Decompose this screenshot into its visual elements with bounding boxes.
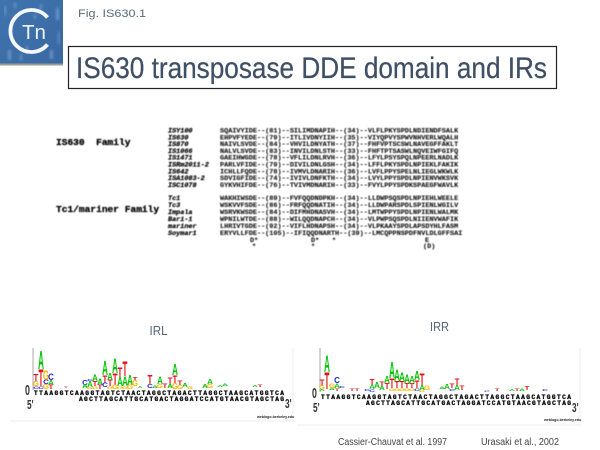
IRR sequence logo: C: [339, 386, 346, 389]
IRR sequence logo: A: [369, 385, 375, 391]
IRL sequence logo: T: [113, 370, 117, 389]
IRL sequence logo: G: [117, 386, 123, 390]
IRL sequence logo: G: [157, 384, 163, 389]
IRR sequence logo: T: [405, 381, 410, 390]
family label: Tc1/mariner: Tc1/mariner Family: [56, 204, 159, 215]
IRL position labels: AGCTTAGCATTGCATGACTAGGATCCATGTAACGTAGCTAG: [79, 396, 284, 403]
IRR sequence logo: T: [400, 379, 405, 390]
IRL sequence logo: T: [98, 385, 103, 391]
IRL sequence logo: T: [118, 366, 122, 381]
IRR 3' marker: 3': [572, 401, 579, 416]
IRR sequence logo: [319, 348, 549, 394]
IRL sequence logo: G: [43, 382, 49, 391]
IRL panel frame: [10, 348, 293, 421]
IRL label: IRL: [150, 324, 168, 338]
IRR sequence logo: T: [325, 368, 329, 394]
Tc1/mariner family sequences: [220, 195, 462, 238]
IRR sequence logo: G: [394, 388, 400, 392]
IS630 family sequences: SDVIGFIDE--(74)--IVIVLDNFKTH--(34)--LVYLPPYSPDLNPIENVWKSVK: [220, 175, 459, 183]
IRL sequence logo: A: [102, 358, 108, 380]
IRR sequence logo: A: [519, 388, 525, 392]
IRL sequence logo: T: [148, 373, 153, 388]
IS630 family names: IS870: [168, 141, 188, 149]
IRR sequence logo: G: [424, 386, 431, 392]
conserved residue markers: D*: [250, 237, 258, 245]
IRL sequence logo: G: [92, 386, 98, 390]
IRL sequence logo: T: [163, 384, 168, 390]
IRL sequence logo: T: [258, 384, 263, 388]
IS630 family names: ISA1083-2: [168, 175, 205, 183]
IRL sequence logo: A: [97, 377, 103, 387]
IS630 family names: ISC1078: [168, 182, 197, 190]
conserved residue markers: *: [332, 237, 336, 245]
family label: IS630: IS630 Family: [56, 137, 131, 148]
IRL sequence logo: G: [177, 385, 183, 390]
IRL sequence logo: A: [217, 385, 224, 388]
IRL sequence logo: A: [202, 384, 208, 389]
IRR sequence logo: G: [319, 385, 325, 390]
IS630 family sequences: [220, 128, 459, 190]
conserved residue markers: D*: [311, 237, 319, 245]
IRL sequence logo: C: [82, 378, 89, 387]
IRR sequence logo: T: [410, 381, 415, 390]
IRR sequence logo: C: [364, 389, 371, 392]
IRL sequence logo: A: [157, 375, 163, 387]
IRR sequence logo: C: [334, 376, 340, 385]
IRR sequence logo: A: [419, 383, 426, 392]
IRL sequence logo: T: [123, 359, 128, 381]
IRL sequence logo: A: [182, 383, 188, 388]
IRR sequence logo: T: [495, 388, 500, 392]
IS630 family names: IS1471: [168, 155, 192, 163]
IS630 family names: IS642: [168, 168, 188, 176]
IRL sequence logo: T: [34, 372, 39, 383]
Tc1/mariner family names: Tc3: [168, 202, 180, 210]
IRR sequence logo: A: [384, 374, 390, 385]
IRL zero tick: 0: [25, 382, 30, 399]
IRL sequence logo: T: [64, 386, 68, 388]
IRR sequence logo: A: [319, 389, 326, 392]
IRL sequence logo: T: [39, 365, 43, 391]
IRR sequence logo: G: [419, 390, 426, 393]
IRL sequence logo: A: [127, 371, 133, 389]
IS630 family sequences: GAEIHWGDE--(78)--VFLILDNLRVH--(36)--LFYLPSYSPQLNPEERLNADLK: [220, 155, 459, 163]
IRL sequence logo: G: [132, 379, 138, 388]
IRR sequence logo: C: [369, 389, 375, 393]
IRL sequence logo: C: [33, 386, 39, 390]
IRL sequence logo: A: [152, 385, 158, 389]
IRL sequence logo: G: [207, 384, 213, 389]
title: IS630 transposase DDE domain and IRs: [76, 52, 547, 85]
figure number: Fig. IS630.1: [78, 8, 146, 20]
IRR 5' marker: 5': [313, 401, 320, 416]
IRR zero tick: 0: [312, 385, 317, 402]
IRR sequence logo: A: [374, 381, 380, 390]
IS630 family sequences: GYKVHIFDE--(76)--TVIVMDNARIH--(33)--FVYLPPYSPDKSPAEGFWAVLK: [220, 182, 459, 190]
IRR position labels: AGCTTAGCATTGCATGACTAGGATCCATGTAACGTAGCTAG: [366, 400, 571, 407]
IRL sequence logo: G: [107, 386, 113, 390]
IRL sequence logo: C: [102, 383, 108, 389]
IRR sequence logo: A: [329, 387, 335, 391]
Tc1/mariner family names: Tc1: [168, 195, 180, 203]
IS630 family names: IS630: [168, 134, 188, 142]
IRR sequence logo: G: [329, 384, 336, 390]
IS630 family sequences: PARLVFIDE--(79)--DIVILDNLGSH--(34)--LFFLPKYSPDLNPIEKLFAKIK: [220, 162, 459, 170]
IRR sequence logo: A: [454, 383, 461, 392]
IRL sequence logo: C: [43, 380, 49, 386]
citation: Cassier-Chauvat: Cassier-Chauvat et al. 1997: [338, 437, 447, 448]
IRL sequence logo: A: [117, 375, 123, 390]
IRL sequence logo: G: [187, 386, 193, 390]
IRR sequence logo: A: [379, 386, 385, 391]
IS630 family sequences: EHPVFYEDE--(79)--ITLIVDNYIIH--(35)--VIYQPVYSPWVNHVERLWQALH: [220, 134, 458, 142]
IRR sequence logo: C: [414, 388, 420, 392]
IRL sequence logo: G: [122, 386, 128, 390]
IS630 family sequences: NALVLSVDE--(83)--INVILDNLSTH--(33)--FHFTPTSASWLNQVEIWFGIFQ: [220, 148, 458, 156]
IS630 family names: [168, 128, 209, 190]
IRL sequence logo: A: [112, 356, 118, 378]
IRL sequence logo: G: [127, 385, 134, 391]
IRR sequence logo: T: [385, 382, 390, 391]
conserved residue markers: *: [311, 243, 315, 251]
IRR sequence logo: T: [415, 379, 420, 391]
IRR sequence logo: T: [350, 388, 355, 392]
IRL sequence logo: T: [178, 381, 183, 387]
IRL sequence logo: C: [147, 384, 153, 389]
IRL logo credit: weblogo.berkeley.edu: [256, 415, 294, 419]
IRL sequence logo: [33, 347, 263, 391]
IRL sequence logo: A: [107, 371, 113, 382]
IRL sequence logo: A: [172, 361, 178, 379]
IRR sequence logo: A: [444, 382, 451, 391]
Tc1/mariner family names: Bari-1: [168, 216, 192, 224]
IRL sequence logo: A: [87, 380, 93, 389]
IRL sequence logo: G: [33, 379, 39, 388]
IRL sequence logo: T: [49, 385, 54, 391]
icon: CTn logo: [0, 0, 63, 66]
conserved residue markers: [250, 237, 435, 251]
IRR sequence logo: A: [414, 369, 420, 384]
IRL position labels: [34, 390, 284, 403]
IRL sequence logo: G: [43, 369, 49, 384]
Tc1/mariner family sequences: ERYVLLFDE--(105)--IFIQQDNARTH--(39)--LMCQPPNSPDFNVLDLGFFSAI: [220, 230, 462, 238]
Tc1/mariner family names: [167, 195, 197, 238]
Tc1/mariner family sequences: WSKVVFSDE--(86)--FRFQQDNATIH--(34)--LLDWPARSPDLSPIENLWGILV: [220, 202, 459, 210]
IRR sequence logo: G: [409, 388, 415, 392]
IRR sequence logo: T: [395, 379, 400, 390]
IRR label: IRR: [430, 320, 449, 334]
IS630 family sequences: SQAIVYIDE--(81)--SILIMDNAPIH--(34)--VLFLPKYSPDLNDIENDFSALK: [220, 128, 459, 136]
IRL sequence logo: T: [108, 378, 113, 388]
IRL sequence logo: A: [252, 385, 259, 388]
IRL sequence logo: C: [48, 372, 54, 382]
IRR sequence logo: T: [370, 378, 375, 387]
IRR sequence logo: T: [460, 386, 465, 392]
IRR sequence logo: T: [420, 370, 424, 389]
IRL sequence logo: A: [48, 378, 55, 387]
IRR sequence logo: G: [399, 388, 405, 392]
IRR logo credit: weblogo.berkeley.edu: [543, 418, 581, 422]
IRL sequence logo: C: [87, 379, 94, 382]
IRR sequence logo: A: [439, 386, 445, 390]
IRL sequence logo: T: [133, 377, 137, 382]
IRL sequence logo: A: [207, 377, 214, 386]
conserved residue markers: E: [425, 237, 429, 245]
IRL sequence logo: T: [173, 374, 178, 386]
IRR sequence logo: A: [399, 372, 405, 385]
citation: Urasaki: Urasaki et al., 2002: [481, 437, 559, 448]
IRR sequence logo: A: [389, 357, 395, 383]
IRL sequence logo: A: [38, 347, 44, 376]
conserved residue markers: *: [252, 243, 256, 251]
IRL sequence logo: T: [103, 374, 108, 386]
IS630 family names: IS1066: [168, 148, 192, 156]
sequence alignment: [56, 128, 462, 251]
IRL sequence logo: A: [122, 375, 128, 390]
IRR sequence logo: T: [380, 382, 385, 388]
IRL 3' marker: 3': [285, 397, 292, 412]
IS630 family sequences: NAIVLSVDE--(84)--VHVILDNYATH--(37)--FHFVPTSCSWLNAVEGFFAKLT: [220, 141, 458, 149]
IRL sequence logo: A: [222, 383, 228, 387]
IRR position labels: TTAAGGTCAAGGTAGTCTAACTAGGCTAGACTTAGGCTAAGCATGGTCA: [321, 394, 571, 401]
IRR sequence logo: A: [394, 366, 400, 385]
IRR sequence logo: T: [320, 378, 325, 388]
IRR position labels: [321, 394, 571, 407]
Tc1/mariner family names: mariner: [167, 223, 197, 231]
IRR sequence logo: G: [389, 388, 395, 392]
panel: IRL: [10, 324, 294, 421]
IRR sequence logo: G: [404, 388, 410, 392]
IRL position labels: TTAAGGTCAAGGTAGTCTAACTAGGCTAGACTTAGGCTAAGCATGGTCA: [34, 390, 284, 397]
IRL sequence logo: C: [38, 386, 44, 390]
IRR sequence logo: T: [455, 377, 460, 387]
IS630 family names: ISY100: [168, 128, 192, 136]
IS630 family names: ISRm2011-2: [168, 162, 209, 170]
IRR sequence logo: T: [390, 377, 394, 392]
IRL sequence logo: A: [167, 384, 173, 389]
IRR sequence logo: C: [542, 389, 549, 392]
IRR sequence logo: A: [334, 384, 340, 390]
IRL sequence logo: T: [168, 376, 173, 386]
IRR sequence logo: T: [525, 386, 529, 391]
IRR sequence logo: T: [450, 384, 455, 390]
IS630 family sequences: ICHLLFQDE--(78)--IVMVLDNARIH--(36)--LVFLPPYSPELNLIEGLWKWLK: [220, 168, 459, 176]
IRL sequence logo: A: [92, 373, 98, 383]
IRR sequence logo: C: [484, 391, 491, 393]
Tc1/mariner family sequences: WAKHIWSDE--(89)--FVFQQDNDPKH--(34)--LLDWPSQSPDLNPIEHLWEELE: [220, 195, 458, 203]
IRR sequence logo: A: [324, 351, 330, 377]
IRR sequence logo: A: [404, 374, 410, 387]
IRR sequence logo: T: [335, 388, 340, 392]
Tc1/mariner family names: Soymar1: [168, 230, 197, 238]
IRL sequence logo: T: [93, 379, 98, 388]
Tc1/mariner family sequences: WPNILWTDE--(88)--WILQQDNAPCH--(34)--VLPWPSQSPDLNIIENVWAFIK: [220, 216, 459, 224]
IRR sequence logo: C: [449, 389, 456, 392]
IRR sequence logo: T: [355, 388, 360, 392]
IRR sequence logo: A: [409, 374, 415, 385]
icon: CTn logo: Tn: [22, 22, 46, 44]
Tc1/mariner family sequences: WSRVKWSDE--(84)--DIFMHDNASVH--(34)--LMTWPPYSPDLNPIENLWALMK: [220, 209, 459, 217]
Tc1/mariner family names: Impala: [168, 209, 192, 217]
IRR sequence logo: A: [509, 389, 516, 392]
IRR panel frame: [297, 348, 580, 425]
IRL sequence logo: G: [172, 382, 178, 391]
conserved residue markers: (D): [423, 243, 435, 251]
panel: IRR: [297, 320, 581, 425]
IRL sequence logo: G: [112, 385, 119, 391]
IRR sequence logo: T: [515, 388, 520, 392]
IRL 5' marker: 5': [27, 398, 34, 413]
IRL sequence logo: A: [138, 385, 143, 389]
IRL sequence logo: G: [87, 387, 94, 390]
Tc1/mariner family sequences: LHRIVTGDE--(92)--VIFLHDNAPSH--(34)--VLPKAAYSPDLAPSDYHLFASM: [220, 223, 458, 231]
IRL sequence logo: A: [82, 384, 88, 389]
